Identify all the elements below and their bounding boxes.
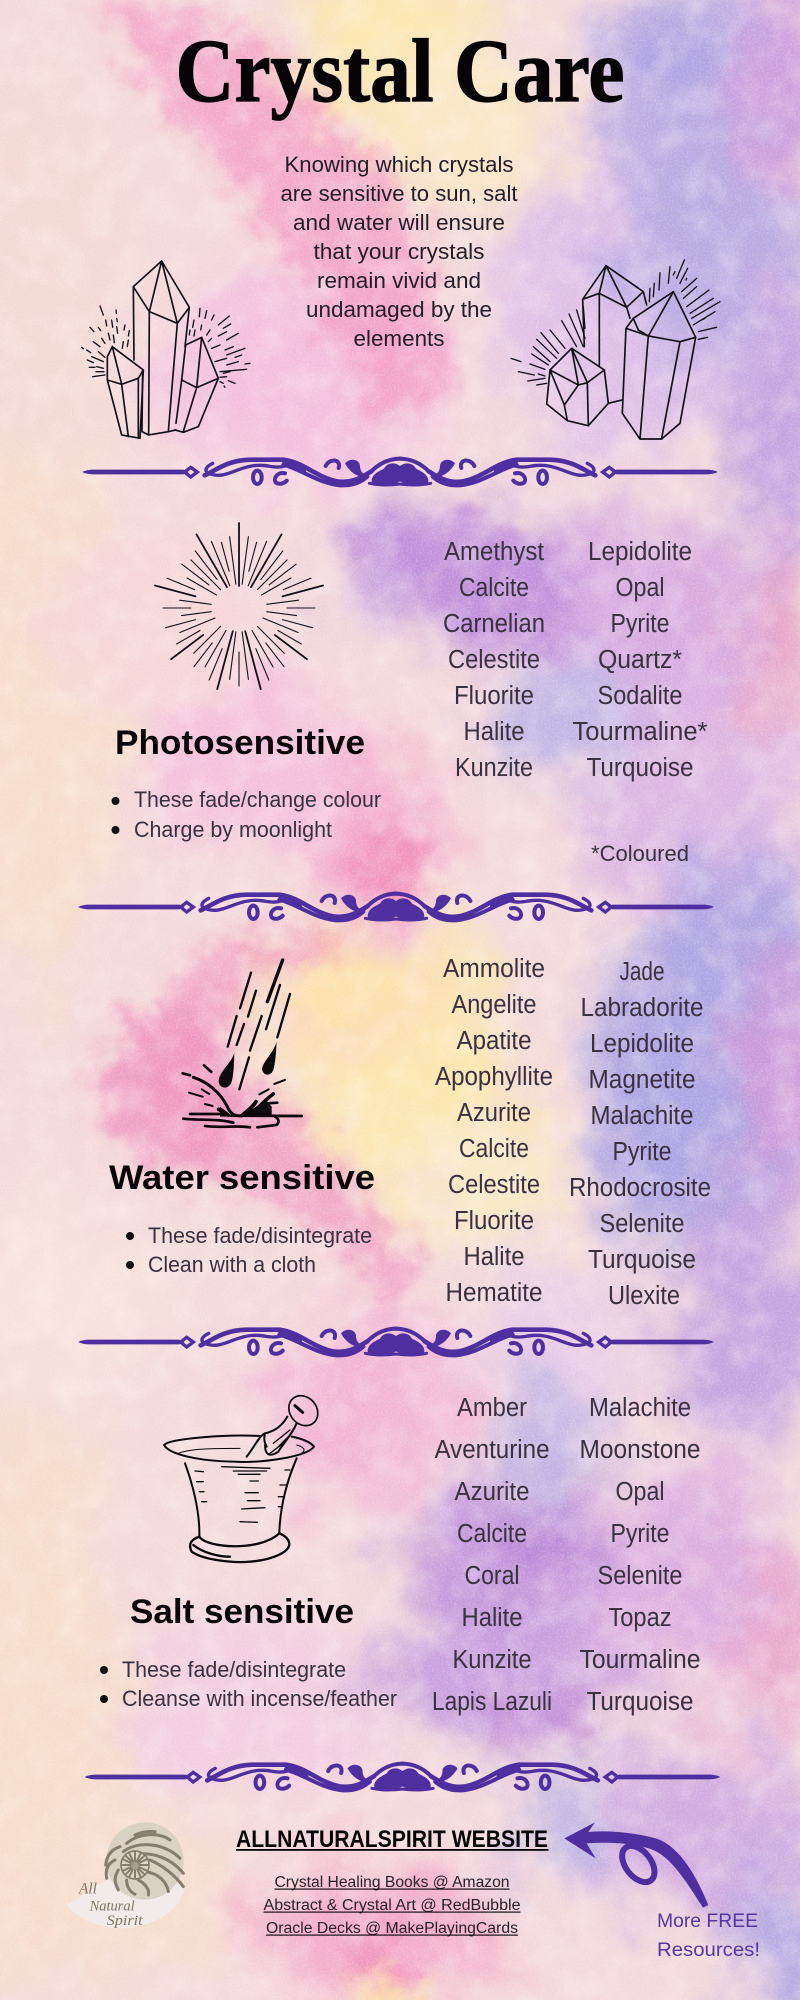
bullets: salt sensitive: These fade/disintegrate xyxy=(122,1657,346,1682)
list: water sensitive column 1: Angelite xyxy=(452,991,536,1019)
more free resources: Resources! xyxy=(657,1939,760,1961)
list: salt sensitive column 2: Turquoise xyxy=(586,1688,694,1716)
divider 2 xyxy=(78,894,714,920)
list: water sensitive column 2: Rhodocrosite xyxy=(569,1174,711,1202)
list: water sensitive column 1: Celestite xyxy=(448,1171,540,1199)
list: salt sensitive column 1: Lapis Lazuli xyxy=(432,1688,552,1716)
links: Oracle Decks @ MakePlayingCards xyxy=(266,1920,518,1937)
intro text: undamaged by the xyxy=(306,297,492,322)
panel: water sensitive xyxy=(109,955,711,1310)
list: water sensitive column 2: Labradorite xyxy=(580,994,704,1022)
icon: sunburst xyxy=(155,523,323,689)
list: salt sensitive column 2: Malachite xyxy=(589,1394,691,1422)
footnote: coloured: *Coloured xyxy=(591,841,689,866)
list: water sensitive column 2: Pyrite xyxy=(612,1138,672,1166)
list: water sensitive column 2 xyxy=(569,958,711,1310)
list: water sensitive column 2: Magnetite xyxy=(588,1066,696,1094)
list: salt sensitive column 1: Calcite xyxy=(457,1520,527,1548)
list: photosensitive column 1: Halite xyxy=(464,718,524,746)
list: water sensitive column 1: Calcite xyxy=(459,1135,529,1163)
icon: mortar and pestle xyxy=(164,1390,324,1562)
list: water sensitive column 1: Fluorite xyxy=(454,1207,534,1235)
links: Crystal Healing Books @ Amazon xyxy=(274,1874,510,1891)
intro text: remain vivid and xyxy=(317,268,481,293)
list: salt sensitive column 1: Azurite xyxy=(454,1478,530,1506)
list: photosensitive column 1 xyxy=(443,538,545,782)
icon: nautilus logo: Natural xyxy=(89,1898,135,1914)
divider 1 xyxy=(82,459,718,485)
panel: photosensitive xyxy=(112,523,708,866)
list: water sensitive column 2: Lepidolite xyxy=(590,1030,694,1058)
list: water sensitive column 2: Malachite xyxy=(590,1102,694,1130)
intro text: and water will ensure xyxy=(293,210,505,235)
list: photosensitive column 2: Lepidolite xyxy=(588,538,692,566)
list: photosensitive column 1: Calcite xyxy=(459,574,529,602)
icon: crystal cluster right xyxy=(511,260,720,439)
bullets: photosensitive: Charge by moonlight xyxy=(134,817,332,842)
list: salt sensitive column 2: Selenite xyxy=(598,1562,682,1590)
bullets: water sensitive: Clean with a cloth xyxy=(148,1252,316,1277)
list: salt sensitive column 2: Moonstone xyxy=(580,1436,700,1464)
intro text: are sensitive to sun, salt xyxy=(280,181,518,206)
list: photosensitive column 2: Pyrite xyxy=(610,610,670,638)
more free resources xyxy=(657,1910,760,1961)
icon: nautilus logo xyxy=(67,1822,185,1929)
list: salt sensitive column 1: Coral xyxy=(464,1562,520,1590)
list: photosensitive column 1: Fluorite xyxy=(454,682,534,710)
list: water sensitive column 1: Ammolite xyxy=(443,955,545,983)
bullets: water sensitive: These fade/disintegrate xyxy=(148,1223,372,1248)
list: photosensitive column 2: Turquoise xyxy=(586,754,694,782)
more free resources: More FREE xyxy=(657,1910,758,1932)
list: water sensitive column 1: Apatite xyxy=(456,1027,532,1055)
list: salt sensitive column 2 xyxy=(580,1394,700,1716)
icon: water splash xyxy=(183,960,302,1127)
list: water sensitive column 2: Ulexite xyxy=(608,1282,680,1310)
bullets: water sensitive xyxy=(126,1223,372,1277)
list: salt sensitive column 1 xyxy=(432,1394,552,1716)
bullets: salt sensitive xyxy=(100,1657,397,1711)
list: photosensitive column 2: Tourmaline* xyxy=(572,718,708,746)
links: Abstract & Crystal Art @ RedBubble xyxy=(264,1897,520,1914)
icon: nautilus logo: All xyxy=(78,1881,97,1898)
list: water sensitive column 2: Selenite xyxy=(600,1210,684,1238)
list: salt sensitive column 1: Aventurine xyxy=(434,1436,550,1464)
list: photosensitive column 2 xyxy=(572,538,708,782)
list: water sensitive column 1: Halite xyxy=(464,1243,524,1271)
icon: nautilus logo: Spirit xyxy=(107,1913,144,1929)
list: salt sensitive column 2: Opal xyxy=(616,1478,664,1506)
list: water sensitive column 1: Apophyllite xyxy=(435,1063,553,1091)
list: photosensitive column 2: Quartz* xyxy=(598,646,682,674)
divider 4 xyxy=(85,1764,720,1790)
list: photosensitive column 1: Celestite xyxy=(448,646,540,674)
list: photosensitive column 2: Opal xyxy=(616,574,664,602)
heading: salt sensitive: Salt sensitive xyxy=(130,1593,354,1631)
list: water sensitive column 1 xyxy=(435,955,553,1307)
list: water sensitive column 1: Azurite xyxy=(457,1099,531,1127)
heading: photosensitive: Photosensitive xyxy=(115,724,365,762)
intro text: that your crystals xyxy=(314,239,484,264)
intro text: Knowing which crystals xyxy=(284,152,514,177)
panel: salt sensitive xyxy=(100,1390,700,1716)
list: salt sensitive column 1: Kunzite xyxy=(452,1646,532,1674)
list: photosensitive column 1: Amethyst xyxy=(444,538,544,566)
intro text xyxy=(280,152,518,351)
list: photosensitive column 1: Carnelian xyxy=(443,610,545,638)
list: salt sensitive column 2: Pyrite xyxy=(610,1520,670,1548)
divider 3 xyxy=(78,1329,714,1355)
list: salt sensitive column 1: Amber xyxy=(457,1394,527,1422)
arrow xyxy=(564,1822,708,1908)
website heading: ALLNATURALSPIRIT WEBSITE xyxy=(236,1826,548,1853)
list: photosensitive column 2: Sodalite xyxy=(598,682,682,710)
links xyxy=(264,1874,520,1937)
list: salt sensitive column 2: Tourmaline xyxy=(580,1646,700,1674)
bullets: salt sensitive: Cleanse with incense/feather xyxy=(122,1686,397,1711)
list: photosensitive column 1: Kunzite xyxy=(455,754,533,782)
icon: crystal cluster left xyxy=(82,261,250,438)
list: salt sensitive column 2: Topaz xyxy=(608,1604,672,1632)
list: water sensitive column 2: Jade xyxy=(620,958,664,986)
intro text: elements xyxy=(354,326,444,351)
list: water sensitive column 2: Turquoise xyxy=(588,1246,696,1274)
bullets: photosensitive xyxy=(112,787,381,842)
list: water sensitive column 1: Hematite xyxy=(446,1279,542,1307)
bullets: photosensitive: These fade/change colour xyxy=(134,787,381,812)
list: salt sensitive column 1: Halite xyxy=(462,1604,522,1632)
heading: water sensitive: Water sensitive xyxy=(109,1159,375,1197)
title: Crystal Care xyxy=(176,22,624,121)
